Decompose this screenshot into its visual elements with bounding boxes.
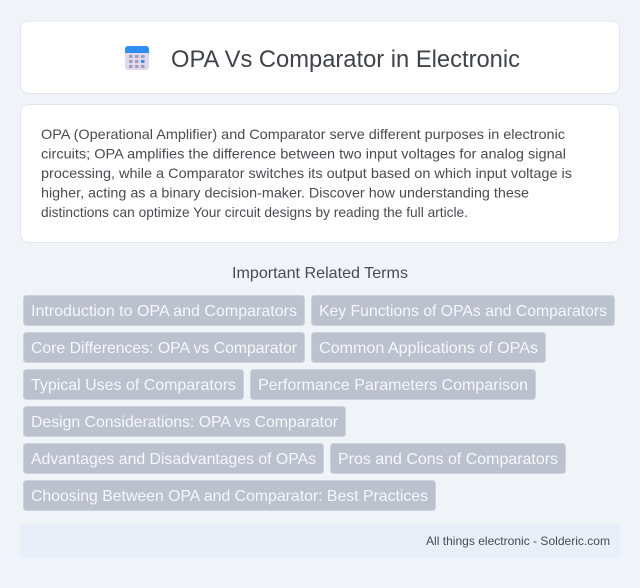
panel: introduction bbox=[20, 104, 620, 242]
text block: introduction paragraph: higher, acting as a binary decision-maker. Discover how understanding these bbox=[41, 184, 529, 200]
tag: common applications: Common Applications of OPAs bbox=[319, 340, 538, 357]
tag: core differences: Core Differences: OPA vs Comparator bbox=[31, 340, 298, 357]
text block: introduction paragraph bbox=[41, 126, 572, 220]
tag: introduction bbox=[24, 296, 304, 326]
tag: design considerations: Design Considerations: OPA vs Comparator bbox=[31, 414, 339, 431]
tag: pros and cons: Pros and Cons of Comparators bbox=[338, 451, 558, 468]
tag: choosing between: Choosing Between OPA and Comparator: Best Practices bbox=[31, 488, 428, 505]
panel: related terms tags bbox=[24, 296, 614, 510]
tag: typical uses: Typical Uses of Comparators bbox=[31, 377, 236, 394]
tag: key functions bbox=[312, 296, 614, 326]
footer bbox=[20, 524, 620, 558]
text block: introduction paragraph: processing, while a Comparator switches its output based on which input voltage is bbox=[41, 165, 572, 181]
text block: introduction paragraph: OPA (Operational Amplifier) and Comparator serve different purposes in electronic bbox=[41, 126, 565, 142]
heading: important related terms: Important Related Terms bbox=[232, 265, 408, 282]
tag: typical uses bbox=[24, 370, 244, 400]
tag: advantages and disadvantages: Advantages and Disadvantages of OPAs bbox=[31, 451, 316, 468]
tag: pros and cons bbox=[330, 444, 566, 474]
tag: performance parameters: Performance Parameters Comparison bbox=[258, 377, 528, 394]
tag: design considerations bbox=[24, 406, 346, 436]
panel: header bbox=[20, 21, 620, 94]
title: OPA Vs Comparator in Electronic bbox=[171, 46, 520, 73]
tag: advantages and disadvantages bbox=[24, 444, 324, 474]
tag: common applications bbox=[312, 332, 546, 362]
tag: performance parameters bbox=[250, 370, 536, 400]
footer: All things electronic - Solderic.com bbox=[426, 534, 610, 548]
icon: calendar bbox=[125, 46, 149, 70]
text block: introduction paragraph: distinctions can optimize Your circuit designs by reading the full article. bbox=[41, 204, 468, 220]
tag: core differences bbox=[24, 332, 304, 362]
tag: choosing between bbox=[24, 480, 436, 510]
text block: introduction paragraph: circuits; OPA amplifies the difference between two input voltages for analog signal bbox=[41, 146, 566, 162]
tag: introduction: Introduction to OPA and Comparators bbox=[31, 303, 297, 320]
tag: key functions: Key Functions of OPAs and Comparators bbox=[319, 303, 607, 320]
